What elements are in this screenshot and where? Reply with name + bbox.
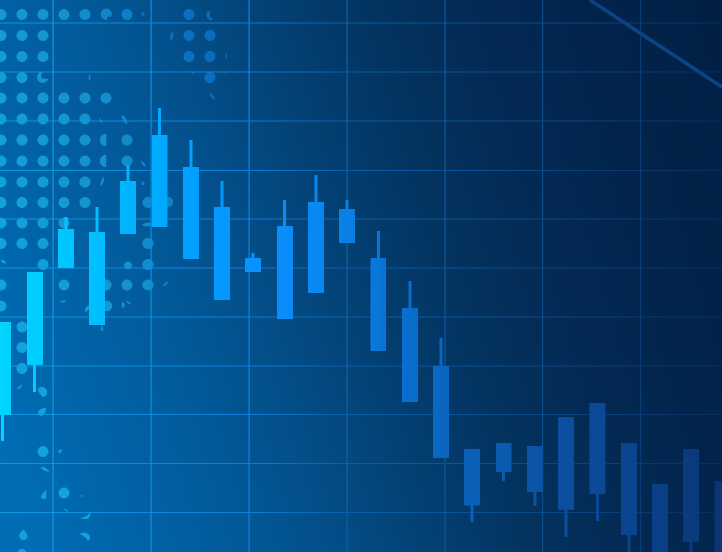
candle 21 [621, 443, 637, 552]
candle 13 [370, 231, 386, 351]
candle 12 [339, 200, 355, 243]
candle 4 [89, 207, 105, 325]
candle 7 [183, 140, 199, 259]
candle 5 [120, 165, 136, 234]
candle 10 [277, 200, 293, 319]
trend line: top right diagonal [590, 0, 722, 87]
candle 17 [496, 443, 512, 481]
candle 8 [214, 181, 230, 300]
candle 2 [27, 272, 43, 392]
candle 18 [527, 446, 543, 506]
candle 19 [558, 417, 574, 537]
candle 23 [683, 449, 699, 552]
candle 20 [590, 403, 606, 521]
candle 3 [58, 217, 74, 268]
candle 11 [308, 175, 324, 293]
candle 22 [652, 484, 668, 552]
candle 6 [152, 108, 168, 227]
candle 9 [245, 253, 261, 272]
candle 16 [464, 449, 480, 522]
dotted world map [0, 9, 227, 552]
candle 14 [402, 281, 418, 402]
candle 15 [433, 338, 449, 458]
candle 1 [0, 322, 11, 441]
candle 24 [714, 481, 722, 552]
